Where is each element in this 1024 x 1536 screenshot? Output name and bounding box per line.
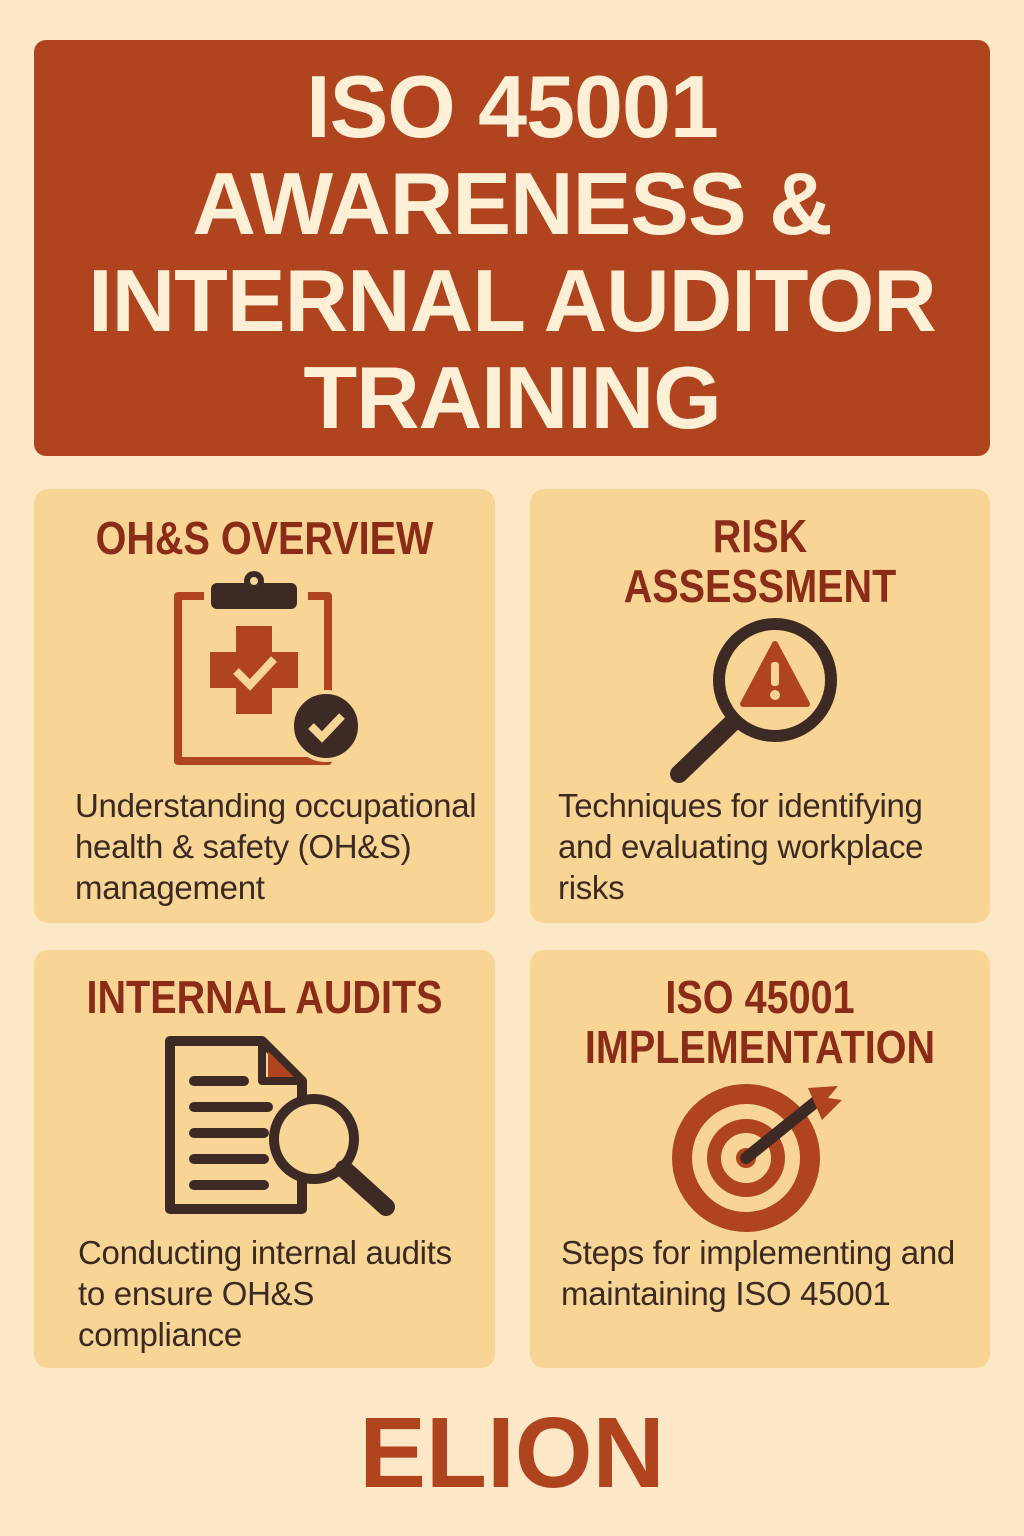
heading: implementation: [585, 971, 935, 1073]
icon: document with magnifier: [165, 1036, 395, 1216]
icon: magnifier with warning: [670, 618, 837, 783]
heading: OH&S overview: OH&S OVERVIEW: [96, 512, 433, 564]
panel: OH&S overview: [34, 489, 495, 923]
panel: risk assessment: [530, 489, 990, 923]
heading: risk assessment: [624, 510, 896, 612]
icon: clipboard with medical cross: [174, 571, 358, 765]
heading: implementation: IMPLEMENTATION: [585, 1021, 935, 1073]
description: risk assessment: Techniques for identifying: [558, 787, 923, 824]
heading: risk assessment: RISK: [713, 510, 807, 562]
description: implementation: Steps for implementing and: [561, 1234, 955, 1271]
title banner: ISO 45001: [306, 57, 718, 156]
description: risk assessment: and evaluating workplace: [558, 828, 923, 865]
description: implementation: maintaining ISO 45001: [561, 1275, 890, 1312]
description: implementation: [561, 1234, 955, 1312]
description: risk assessment: [558, 787, 923, 906]
panel: internal audits: [34, 950, 495, 1368]
brand footer: ELION: [359, 1397, 665, 1509]
title banner: AWARENESS &: [192, 154, 832, 253]
title banner: INTERNAL AUDITOR: [88, 251, 936, 350]
heading: risk assessment: ASSESSMENT: [624, 560, 896, 612]
description: internal audits: Conducting internal audits: [78, 1234, 452, 1271]
heading: internal audits: INTERNAL AUDITS: [86, 971, 443, 1023]
description: internal audits: to ensure OH&S: [78, 1275, 314, 1312]
title banner: TRAINING: [303, 348, 721, 447]
description: OH&S overview: Understanding occupational: [75, 787, 476, 824]
description: internal audits: compliance: [78, 1316, 242, 1353]
icon: target with arrow: [672, 1084, 842, 1232]
heading: implementation: ISO 45001: [665, 971, 855, 1023]
description: risk assessment: risks: [558, 869, 624, 906]
panel: implementation: [530, 950, 990, 1368]
description: OH&S overview: management: [75, 869, 265, 906]
title banner: [34, 40, 990, 456]
description: internal audits: [78, 1234, 452, 1353]
description: OH&S overview: health & safety (OH&S): [75, 828, 411, 865]
description: OH&S overview: [75, 787, 476, 906]
